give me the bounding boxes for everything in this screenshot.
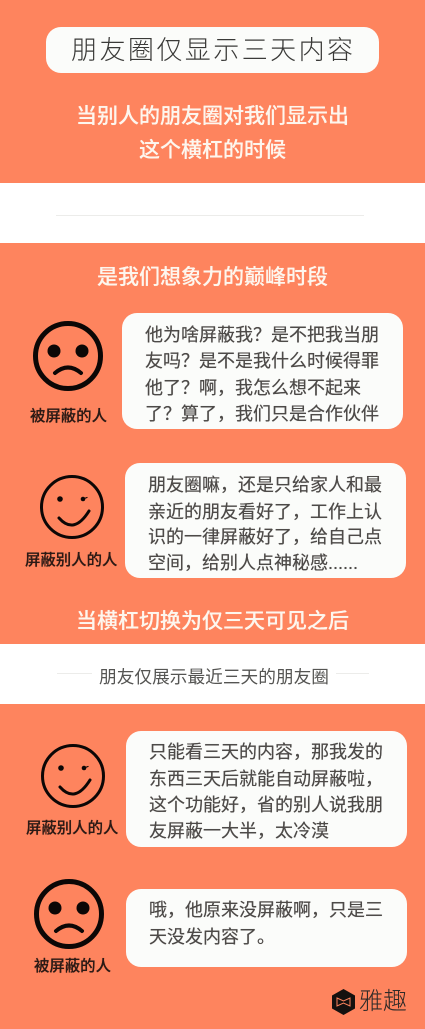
bubble three line one: 只能看三天的内容，那我发的: [149, 742, 383, 762]
heading: after the switch: 当横杠切换为仅三天可见之后: [76, 610, 349, 633]
bubble two line four: 空间，给别人点神秘感......: [148, 553, 358, 573]
bubble two: [125, 463, 406, 578]
title pill: [46, 27, 379, 73]
bubble three line three: 这个功能好，省的别人说我朋: [149, 795, 383, 815]
label: blocking person one: 屏蔽别人的人: [25, 552, 117, 569]
title text: 朋友圈仅显示三天内容: [71, 35, 356, 65]
heading: intro line two: 这个横杠的时候: [139, 139, 286, 162]
bubble two line one: 朋友圈嘛，还是只给家人和最: [148, 475, 382, 495]
bubble two line two: 亲近的朋友看好了，工作上认: [148, 502, 382, 522]
bubble four: [126, 889, 407, 967]
caption text: 朋友仅展示最近三天的朋友圈: [99, 667, 329, 687]
logo: [332, 988, 407, 1015]
heading: peak imagination: 是我们想象力的巅峰时段: [97, 266, 328, 289]
icon: logo hexagon: [332, 989, 355, 1015]
icon: smiling face two: [41, 744, 105, 808]
bubble three line two: 东西三天后就能自动屏蔽啦，: [149, 769, 383, 789]
icon: smiling face one: [40, 475, 104, 539]
white band with caption: [0, 644, 425, 704]
icon: sad face two: [34, 879, 104, 949]
label: blocked person one: 被屏蔽的人: [30, 408, 107, 425]
bubble two line three: 识的一律屏蔽好了，给自己点: [148, 527, 382, 547]
label: blocked person two: 被屏蔽的人: [34, 958, 111, 975]
bubble four line two: 天没发内容了。: [149, 927, 275, 947]
heading: intro line one: 当别人的朋友圈对我们显示出: [76, 105, 349, 128]
bubble one line one: 他为啥屏蔽我？是不把我当朋: [145, 325, 379, 345]
white band with divider: [0, 183, 425, 243]
bubble one line two: 友吗？是不是我什么时候得罪: [145, 351, 379, 371]
label: blocking person two: 屏蔽别人的人: [26, 820, 118, 837]
logo wordmark: 雅趣: [359, 988, 407, 1015]
icon: sad face one: [33, 321, 103, 391]
bubble one: [122, 313, 403, 429]
bubble one line three: 他了？啊，我怎么想不起来: [145, 378, 361, 398]
bubble three: [126, 731, 407, 847]
bubble three line four: 友屏蔽一大半，太冷漠: [149, 821, 329, 841]
bubble one line four: 了？算了，我们只是合作伙伴: [145, 404, 379, 424]
bubble four line one: 哦，他原来没屏蔽啊，只是三: [149, 900, 383, 920]
